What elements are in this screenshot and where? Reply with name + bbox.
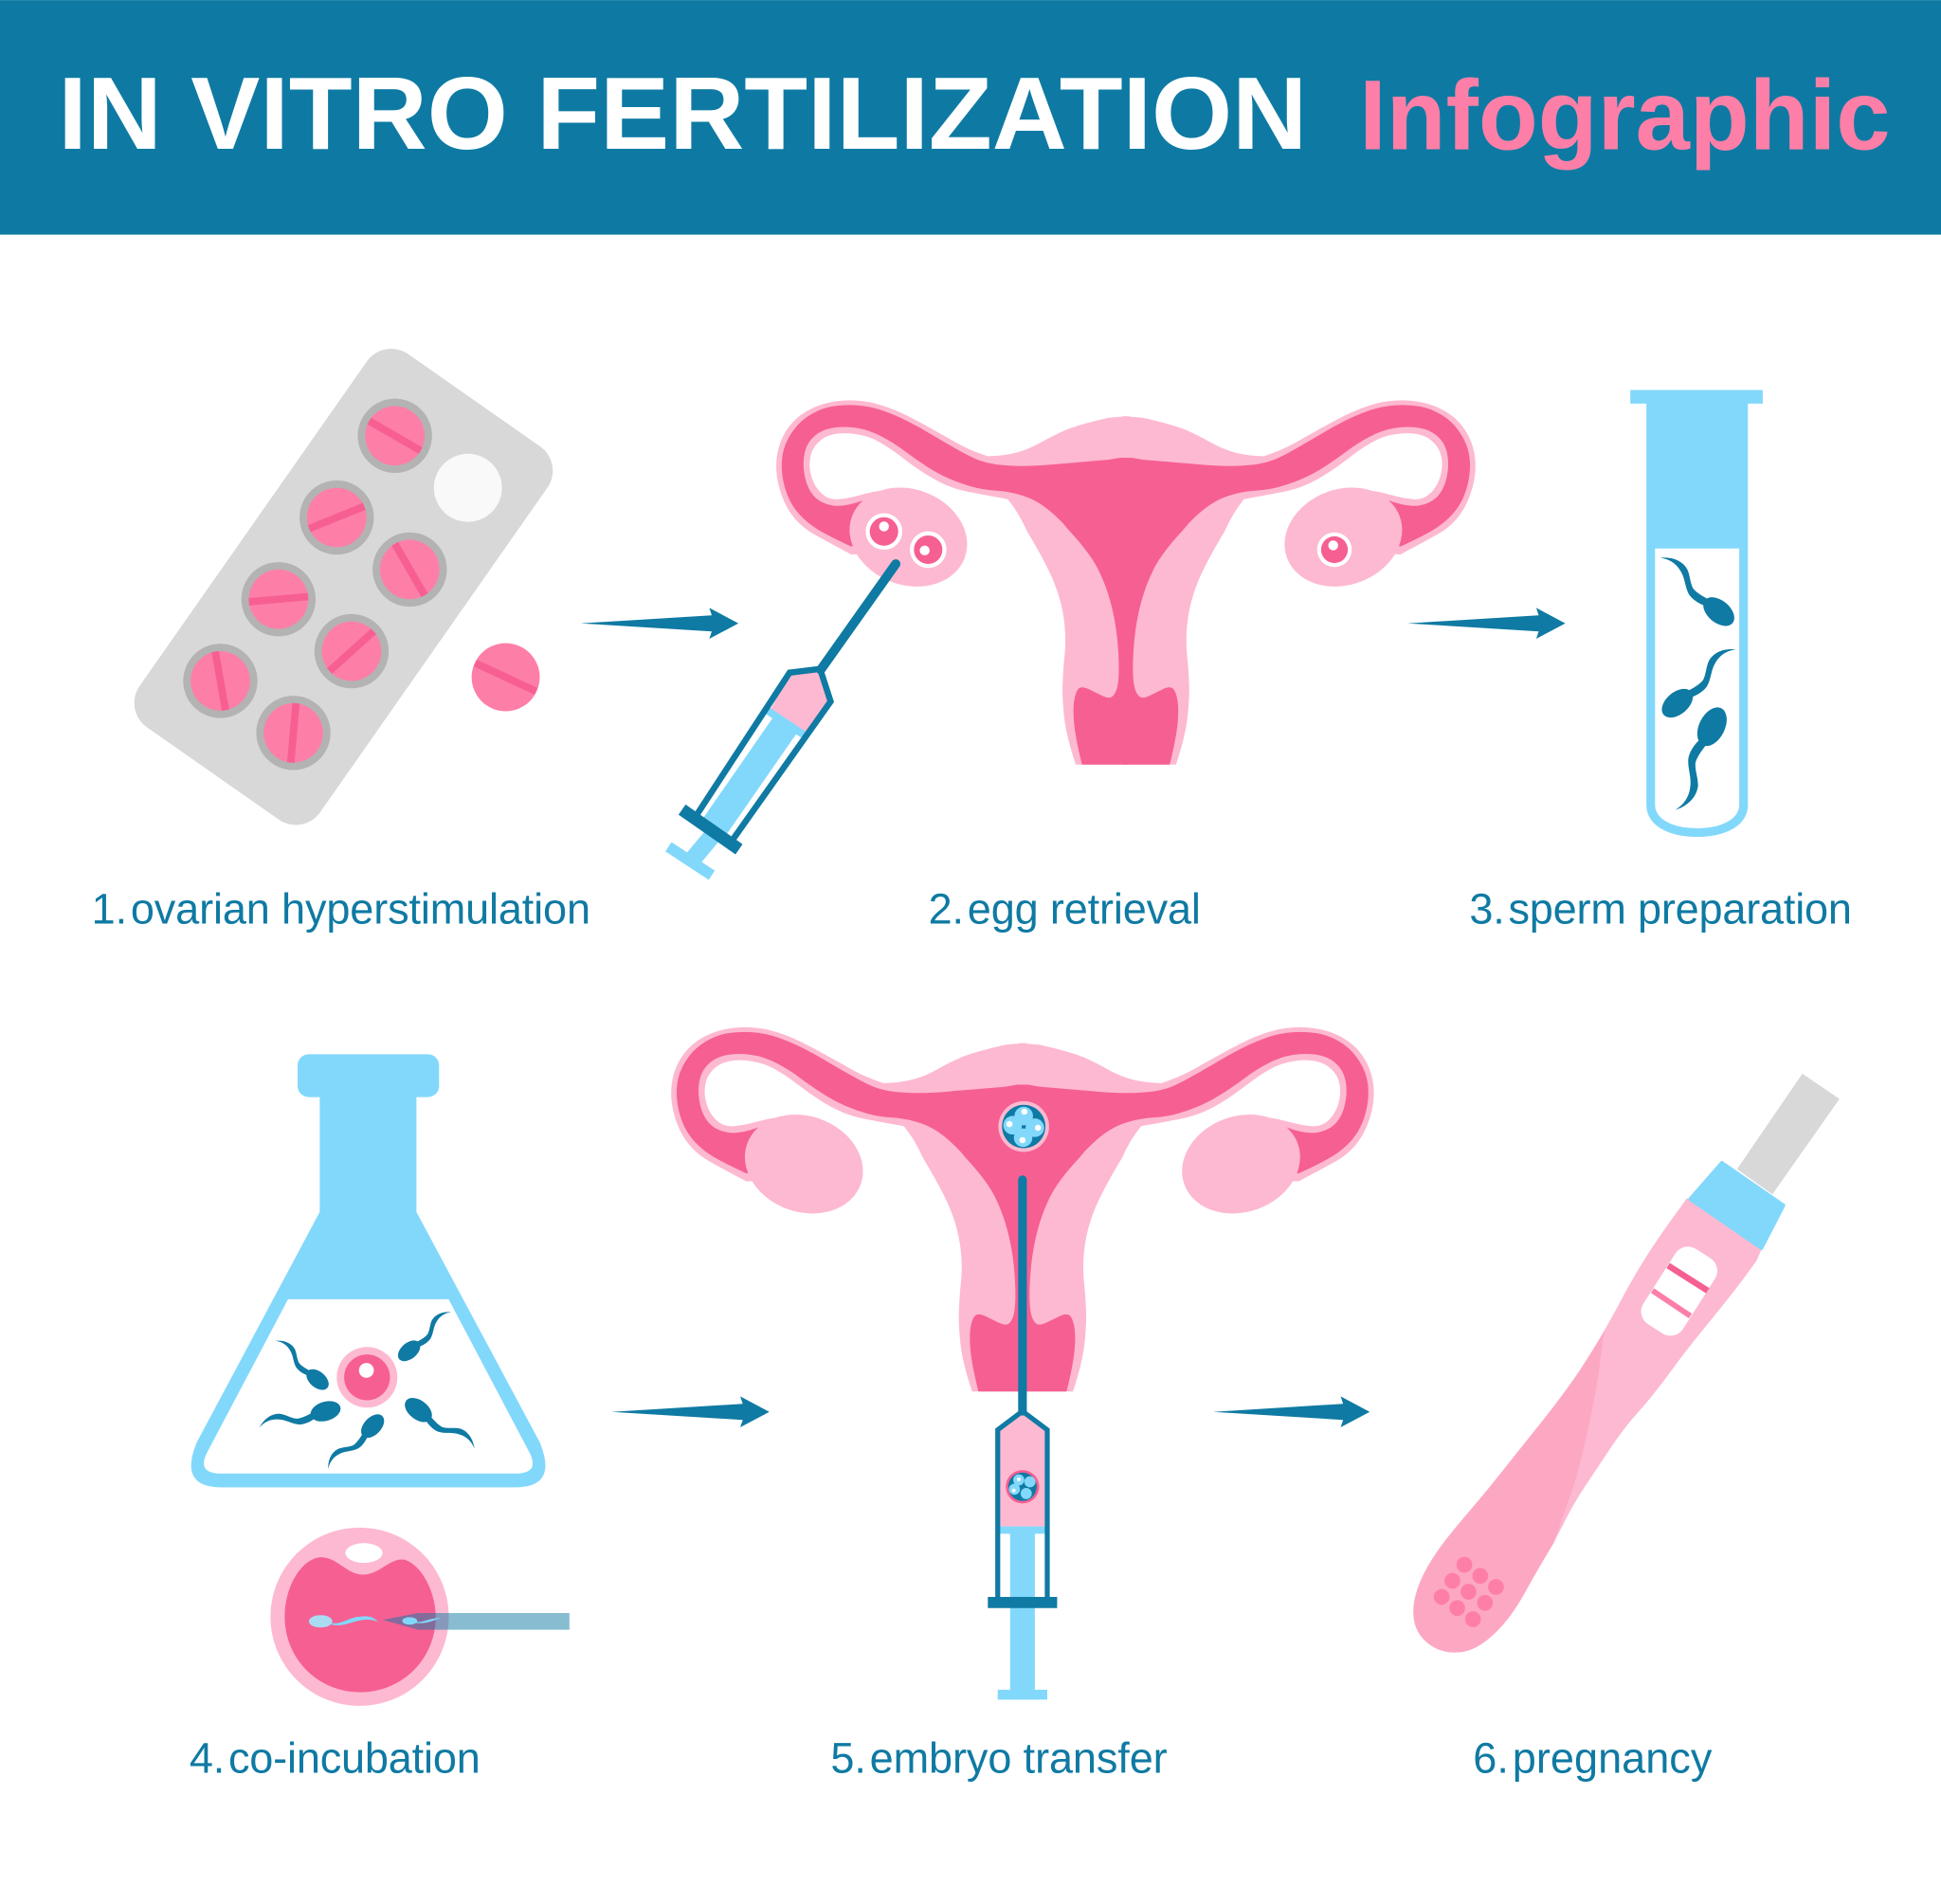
label: step 6: 6.pregnancy [1473,1733,1713,1782]
icon: test tube with sperm [1630,390,1763,837]
icon: blister pack of pills [122,337,565,837]
label: step 5: 5.embryo transfer [830,1733,1168,1782]
header banner [0,0,1941,235]
icon: sperm injection into egg [270,1528,570,1706]
arrow 4 [1213,1396,1370,1427]
arrow 2 [1407,607,1566,639]
icon: uterus with transferred embryo [671,1027,1374,1391]
arrow 3 [611,1396,770,1427]
icon: retrieval syringe [668,564,896,876]
icon: transfer syringe [988,1180,1057,1699]
icon: flask with egg and sperm [191,1054,545,1487]
icon: uterus with eggs in ovaries [776,400,1476,765]
subtitle: Infographic [1359,60,1890,171]
title: IN VITRO FERTILIZATION [58,56,1307,171]
label: step 3: 3.sperm preparation [1469,884,1852,933]
label: step 2: 2.egg retrieval [929,884,1201,933]
icon: loose pill [472,644,539,711]
icon: pregnancy test [1413,1074,1840,1653]
arrow 1 [581,607,738,639]
label: step 1: 1.ovarian hyperstimulation [92,884,590,933]
label: step 4: 4.co-incubation [190,1733,481,1782]
